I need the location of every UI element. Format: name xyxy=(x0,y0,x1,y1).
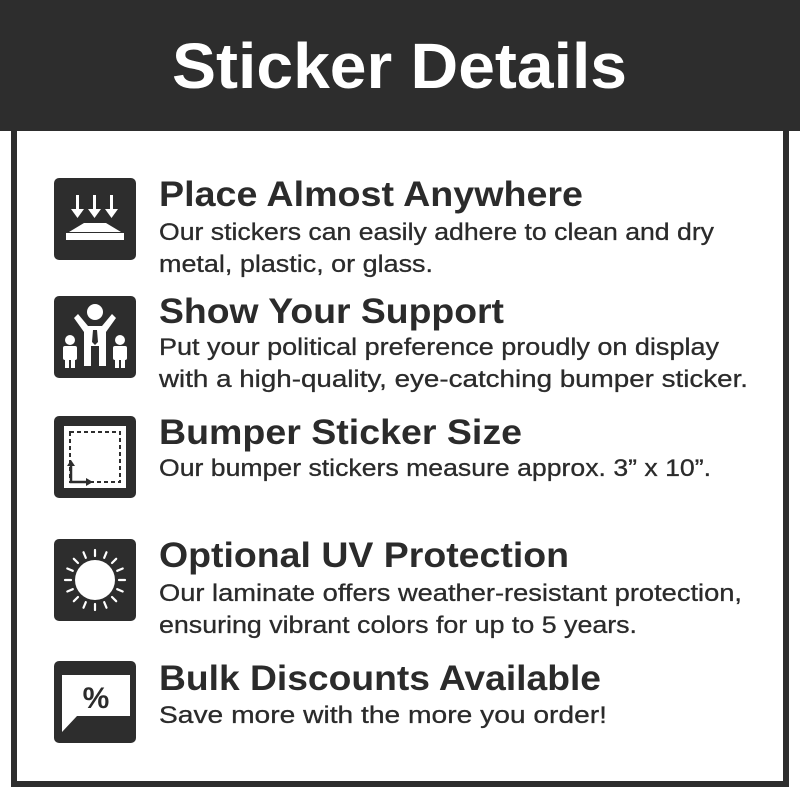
heading: Show Your Support xyxy=(159,292,504,331)
heading: Bumper Sticker Size xyxy=(159,413,522,452)
item: place almost anywhere xyxy=(54,175,714,278)
heading: Optional UV Protection xyxy=(159,536,569,575)
icon: percent speech bubble xyxy=(54,661,136,743)
icon: people xyxy=(54,296,136,378)
body text: Put your political preference proudly on display xyxy=(159,334,719,361)
item: UV protection: ensuring vibrant colors for up to 5 years. xyxy=(159,612,637,639)
body text: Our laminate offers weather-resistant protection, xyxy=(159,580,742,607)
item: bumper sticker size xyxy=(54,413,711,498)
body text: Our bumper stickers measure approx. 3” x 10”. xyxy=(159,455,711,482)
header band xyxy=(0,0,800,131)
frame border xyxy=(14,131,786,784)
item: UV protection xyxy=(54,536,742,639)
item: show your support xyxy=(54,292,748,393)
item: bulk discounts xyxy=(54,659,607,743)
title: Sticker Details xyxy=(172,30,627,102)
icon: percent speech bubble: % xyxy=(83,682,109,715)
body text: Our stickers can easily adhere to clean and dry xyxy=(159,219,714,246)
heading: Bulk Discounts Available xyxy=(159,659,601,698)
body text: Save more with the more you order! xyxy=(159,702,607,729)
icon: dimensions xyxy=(54,416,136,498)
icon: arrows onto surface xyxy=(54,178,136,260)
heading: Place Almost Anywhere xyxy=(159,175,583,214)
item: show your support: with a high-quality, eye-catching bumper sticker. xyxy=(158,366,748,393)
icon: sun xyxy=(54,539,136,621)
item: place almost anywhere: metal, plastic, or glass. xyxy=(159,251,433,278)
